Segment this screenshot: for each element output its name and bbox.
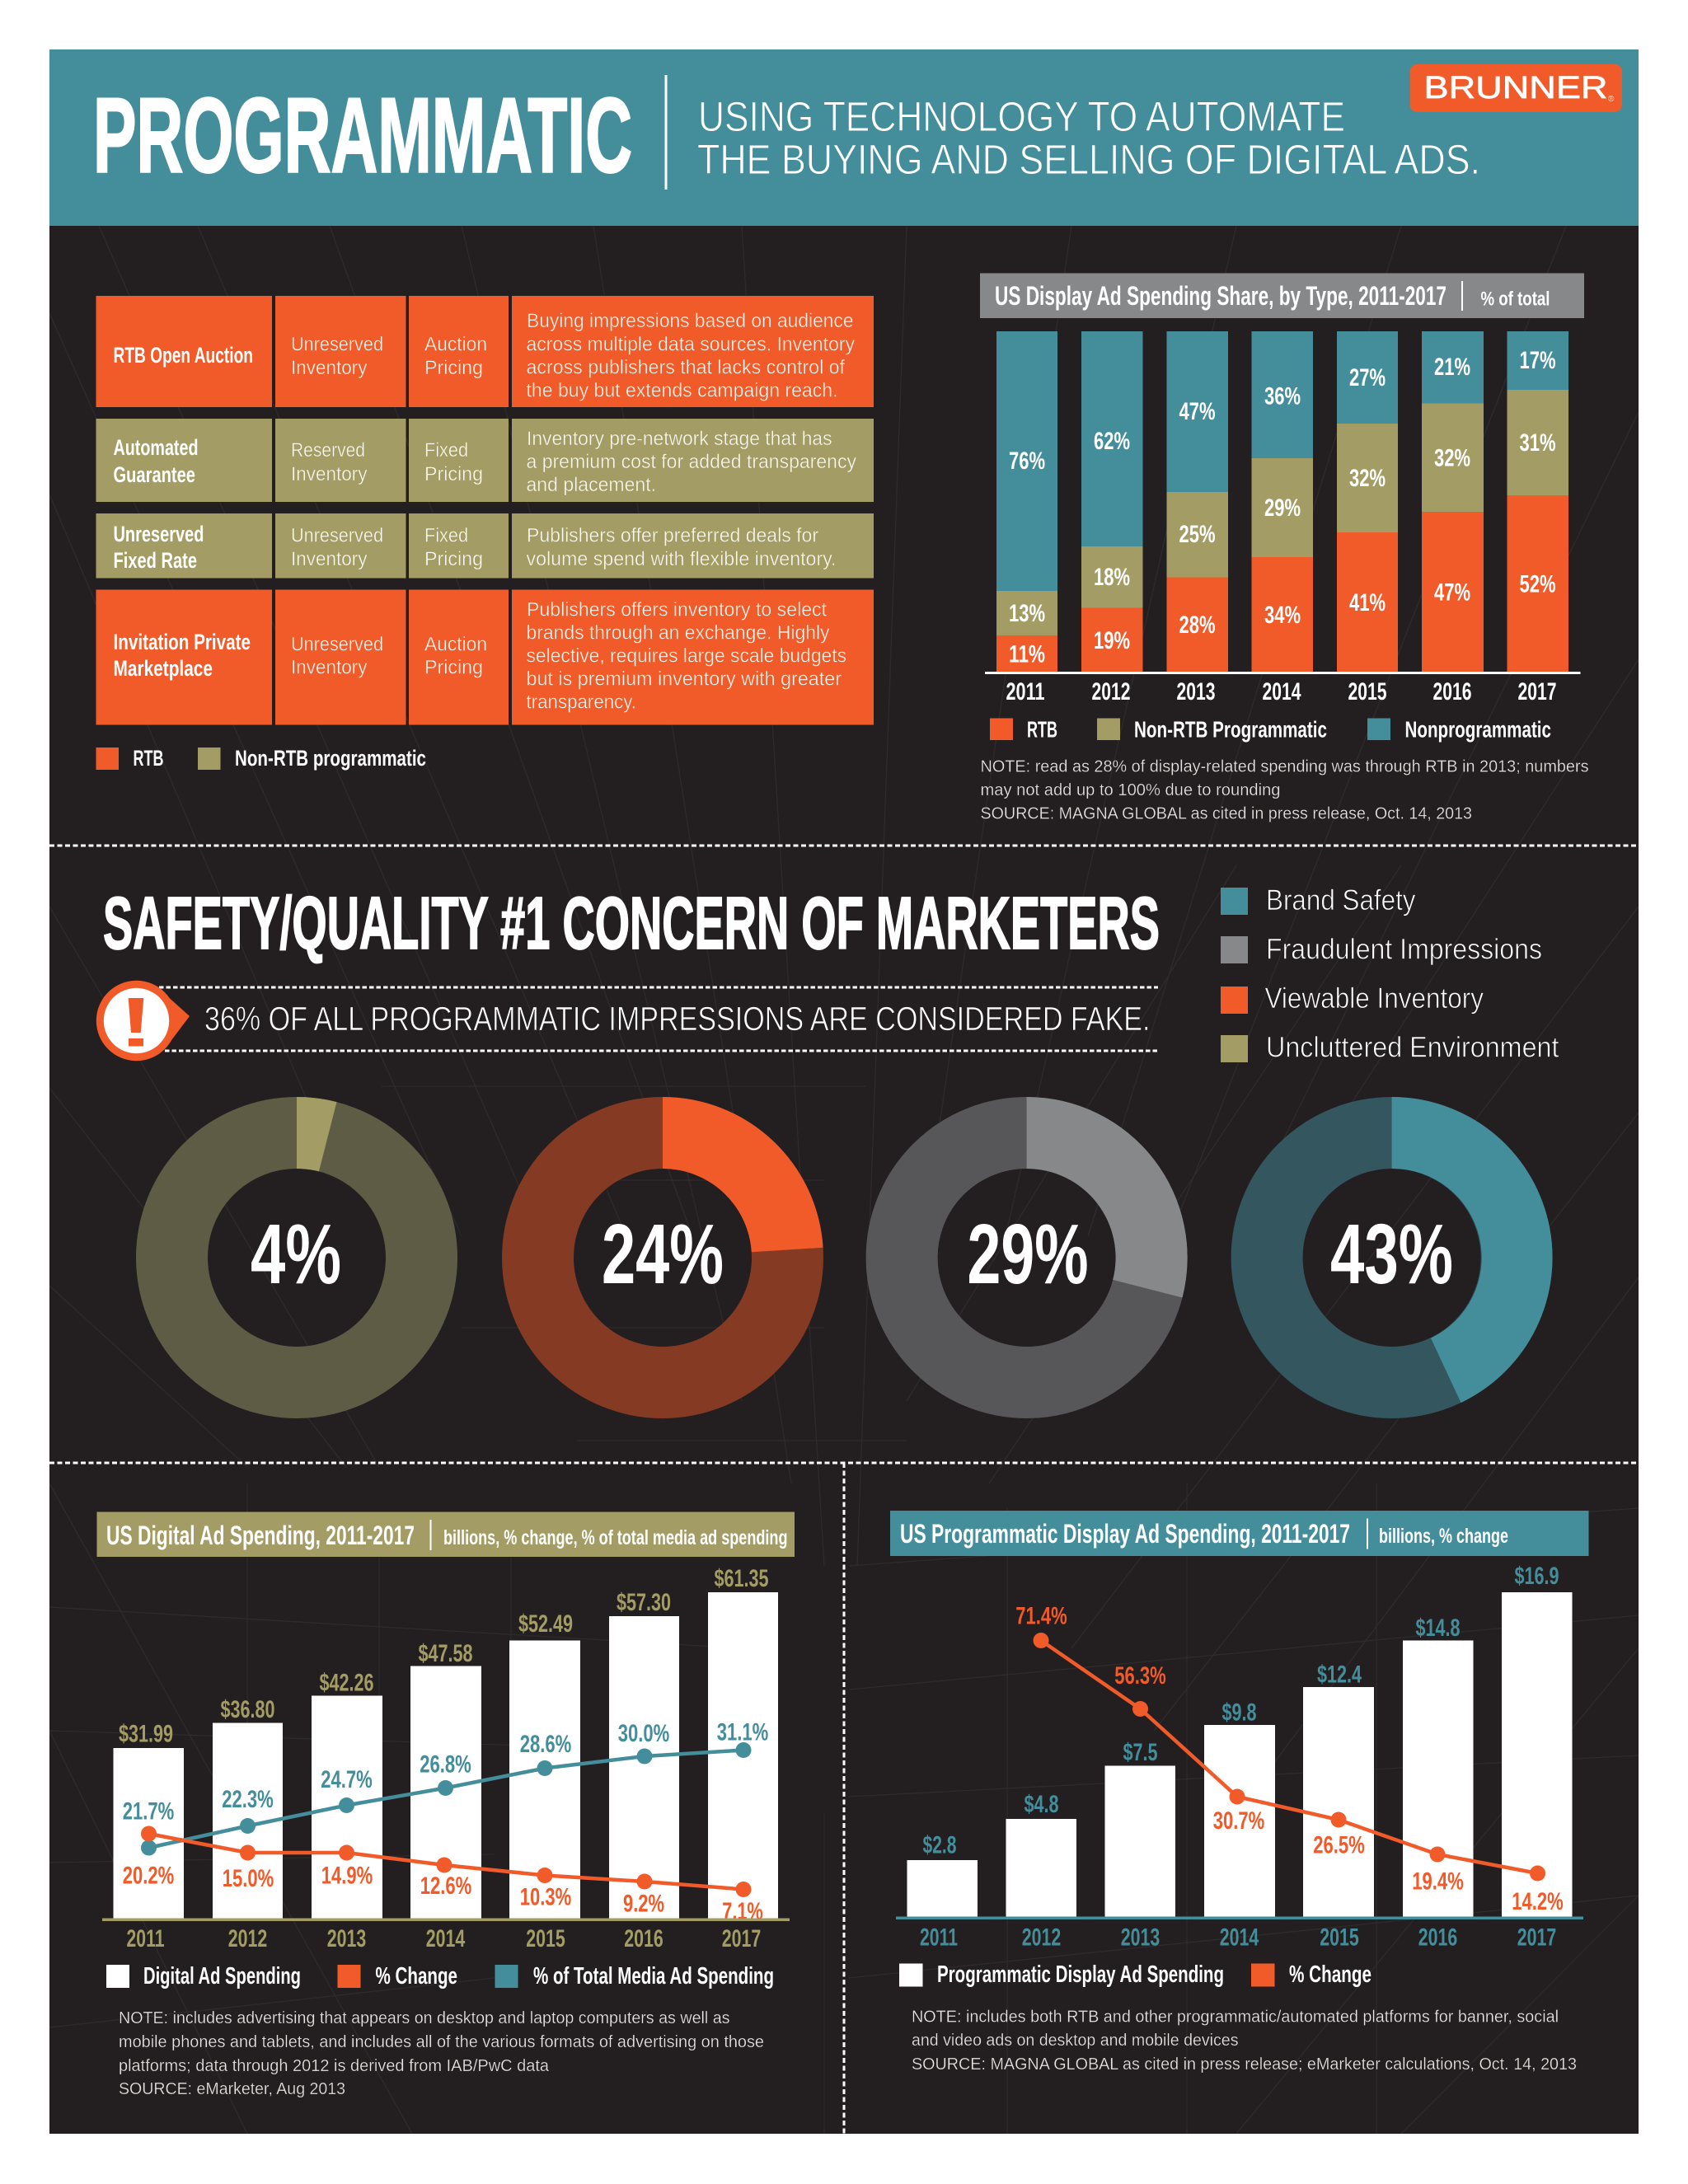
panel: programmatic types table: [96, 296, 874, 771]
x axis with years: 2013: [327, 1925, 366, 1952]
white bars: [907, 1592, 1573, 1917]
line: percent change: 12.6%: [420, 1872, 471, 1900]
bar value labels: 28%: [1179, 612, 1215, 639]
legend: marketer concerns: Viewable Inventory: [1264, 982, 1484, 1015]
line: percent of total media ad spending: 30.0%: [618, 1720, 669, 1747]
bar dollar values: $36.80: [221, 1696, 275, 1723]
table row: Invitation Private Marketplace: Pricing: [424, 656, 483, 679]
table row: RTB Open Auction: across publishers that lacks control of: [526, 356, 845, 379]
table row: RTB Open Auction: the buy but extends campaign reach.: [526, 379, 837, 402]
bar value labels: 34%: [1264, 602, 1301, 629]
table row: Automated Guarantee: Fixed: [424, 439, 468, 462]
donut chart: Fraudulent Impressions 29%: [902, 1097, 1188, 1383]
chart heading: [97, 1511, 795, 1557]
line: percent change: 30.7%: [1213, 1807, 1264, 1835]
table row: RTB Open Auction: [96, 296, 874, 407]
table row: Automated Guarantee: Inventory pre-network stage that has: [527, 428, 832, 450]
bar dollar values: $16.9: [1515, 1563, 1559, 1590]
table row: Invitation Private Marketplace: [96, 590, 874, 725]
bar value labels: 17%: [1520, 347, 1556, 374]
line: percent change: 26.5%: [1313, 1831, 1365, 1859]
table row: Unreserved Fixed Rate: Fixed: [424, 524, 468, 547]
table row: Invitation Private Marketplace: Auction: [424, 633, 487, 656]
donut chart: Brand Safety 43%: 43%: [1330, 1207, 1453, 1301]
bar value labels: 62%: [1094, 428, 1130, 455]
stacked bars: [996, 331, 1568, 672]
line: percent of total media ad spending: 21.7%: [123, 1798, 174, 1825]
table row: RTB Open Auction: Auction: [424, 333, 487, 356]
callout text: 36% OF ALL PROGRAMMATIC IMPRESSIONS ARE CONSIDERED FAKE.: [204, 1000, 1151, 1038]
chart note: [981, 758, 1589, 823]
bar value labels: 47%: [1179, 398, 1215, 425]
table row: Automated Guarantee: Inventory: [291, 463, 368, 485]
chart note: and video ads on desktop and mobile devices: [912, 2032, 1238, 2050]
donut chart: Viewable Inventory 24%: 24%: [602, 1207, 724, 1301]
line: percent change: 14.9%: [321, 1863, 373, 1889]
chart legend: Nonprogrammatic: [1404, 717, 1551, 742]
table row: Unreserved Fixed Rate: Fixed Rate: [114, 548, 197, 573]
chart heading: [890, 1511, 1589, 1556]
table row: RTB Open Auction: across multiple data sources. Inventory: [526, 333, 855, 356]
subtitle: USING TECHNOLOGY TO AUTOMATE: [698, 93, 1345, 140]
table row: Invitation Private Marketplace: but is premium inventory with greater: [526, 668, 842, 691]
bar dollar values: [119, 1565, 768, 1747]
table row: Automated Guarantee: a premium cost for added transparency: [526, 451, 856, 473]
chart note: platforms; data through 2012 is derived from IAB/PwC data: [119, 2057, 550, 2075]
icon: exclamation marker: [96, 981, 190, 1061]
bar value labels: 19%: [1094, 627, 1130, 654]
line: percent change: 20.2%: [123, 1863, 174, 1889]
line: percent of total media ad spending: 24.7%: [321, 1766, 373, 1793]
bar value labels: 32%: [1434, 445, 1470, 471]
callout: [96, 981, 1158, 1061]
bar dollar values: [923, 1563, 1559, 1859]
bar dollar values: $57.30: [617, 1589, 671, 1616]
table row: Invitation Private Marketplace: Unreserved: [291, 633, 383, 656]
bar value labels: 21%: [1434, 354, 1470, 381]
chart note: SOURCE: MAGNA GLOBAL as cited in press release; eMarketer calculations, Oct. 14, 2013: [912, 2055, 1577, 2074]
table row: Automated Guarantee: and placement.: [526, 474, 656, 496]
table row: Automated Guarantee: Automated: [114, 435, 198, 460]
header divider: [664, 75, 668, 190]
header band: [49, 49, 1639, 226]
table row: Unreserved Fixed Rate: Inventory: [291, 548, 368, 570]
line: percent of total media ad spending: 26.8%: [420, 1750, 471, 1779]
line: percent change: 10.3%: [520, 1884, 571, 1910]
table row: Unreserved Fixed Rate: Publishers offer preferred deals for: [527, 524, 818, 547]
x axis with years: 2015: [1320, 1924, 1359, 1952]
chart heading: % of total: [1480, 288, 1550, 310]
panel: US programmatic display ad spending chart: [890, 1511, 1589, 2074]
logo: Brunner: [1409, 64, 1622, 112]
panel: safety and quality concerns: [96, 883, 1559, 1403]
logo: Brunner: BRUNNER: [1424, 71, 1607, 105]
x axis with years: 2016: [1432, 678, 1472, 705]
chart heading: [980, 274, 1584, 318]
line: percent change: [1015, 1602, 1564, 1915]
chart legend: Programmatic Display Ad Spending: [937, 1961, 1224, 1988]
table row: Invitation Private Marketplace: Invitation Private: [114, 630, 251, 654]
title: PROGRAMMATIC: [93, 76, 632, 194]
chart legend: % Change: [376, 1963, 457, 1990]
table row: Invitation Private Marketplace: selective, requires large scale budgets: [526, 644, 846, 668]
table row: RTB Open Auction: RTB Open Auction: [114, 343, 253, 368]
donut chart: Brand Safety 43%: [1267, 1097, 1553, 1403]
x axis with years: 2017: [1518, 678, 1556, 705]
table legend: Non-RTB programmatic: [235, 746, 426, 771]
line: percent of total media ad spending: 28.6%: [520, 1731, 571, 1758]
table row: Automated Guarantee: Reserved: [291, 439, 365, 462]
chart heading: billions, % change, % of total media ad spending: [443, 1526, 788, 1549]
line: percent change: 9.2%: [623, 1891, 664, 1917]
logo: Brunner: ®: [1608, 95, 1615, 104]
chart note: [119, 2009, 764, 2098]
x axis with years: 2016: [624, 1925, 663, 1952]
chart note: SOURCE: MAGNA GLOBAL as cited in press release, Oct. 14, 2013: [981, 804, 1472, 823]
bar dollar values: $2.8: [923, 1831, 956, 1859]
chart heading: US Digital Ad Spending, 2011-2017: [106, 1521, 415, 1550]
bar value labels: 52%: [1520, 570, 1556, 598]
x axis with years: 2011: [920, 1924, 958, 1952]
x axis with years: 2014: [426, 1925, 465, 1952]
line: percent of total media ad spending: [123, 1719, 768, 1856]
x axis with years: 2014: [1220, 1924, 1259, 1952]
line: percent of total media ad spending: 31.1%: [717, 1719, 768, 1746]
bar value labels: 31%: [1520, 429, 1556, 457]
donut chart: Uncluttered Environment 4%: 4%: [251, 1207, 341, 1301]
chart heading: US Display Ad Spending Share, by Type, 2011-2017: [995, 281, 1447, 311]
x axis with years: 2013: [1177, 678, 1215, 705]
table row: Unreserved Fixed Rate: Unreserved: [114, 522, 204, 546]
bar value labels: 32%: [1349, 465, 1386, 492]
line: percent change: 14.2%: [1512, 1888, 1564, 1915]
chart legend: RTB: [1027, 717, 1057, 742]
bar value labels: 29%: [1264, 494, 1301, 522]
table row: Automated Guarantee: [96, 419, 874, 502]
line: percent change: 56.3%: [1114, 1662, 1166, 1690]
x axis with years: 2014: [1263, 678, 1301, 705]
table row: RTB Open Auction: Pricing: [424, 357, 483, 379]
bar dollar values: $12.4: [1317, 1661, 1362, 1688]
chart legend: Non-RTB Programmatic: [1134, 717, 1327, 742]
x axis with years: 2017: [722, 1925, 761, 1952]
x axis with years: 2012: [1091, 678, 1131, 705]
bar value labels: 76%: [1009, 448, 1045, 475]
white bars: [114, 1592, 778, 1919]
bar value labels: 47%: [1434, 579, 1470, 607]
line: percent of total media ad spending: 22.3%: [222, 1786, 274, 1813]
chart heading: billions, % change: [1379, 1525, 1508, 1548]
table row: Unreserved Fixed Rate: Unreserved: [291, 524, 383, 547]
subtitle: [697, 93, 1480, 183]
x axis with years: [102, 1919, 790, 1952]
chart legend: [106, 1963, 774, 1990]
panel: US digital ad spending chart: [97, 1511, 795, 2098]
bar dollar values: $7.5: [1123, 1739, 1157, 1766]
donut chart: Fraudulent Impressions 29%: 29%: [968, 1207, 1088, 1301]
table legend: [96, 746, 426, 771]
table row: Invitation Private Marketplace: Inventory: [291, 656, 368, 679]
legend: marketer concerns: Brand Safety: [1266, 884, 1416, 916]
chart note: NOTE: includes both RTB and other programmatic/automated platforms for banner, social: [912, 2008, 1559, 2026]
table row: Unreserved Fixed Rate: [96, 513, 874, 579]
chart note: mobile phones and tablets, and includes all of the various formats of advertising on those: [119, 2033, 764, 2051]
bar dollar values: $52.49: [518, 1610, 573, 1638]
bar dollar values: $47.58: [419, 1640, 473, 1667]
bar value labels: 27%: [1349, 364, 1386, 391]
table row: RTB Open Auction: Buying impressions based on audience: [527, 310, 854, 332]
bar value labels: 25%: [1179, 521, 1215, 548]
table row: Unreserved Fixed Rate: volume spend with flexible inventory.: [526, 548, 836, 570]
x axis with years: 2012: [228, 1925, 267, 1952]
legend: marketer concerns: [1221, 884, 1559, 1063]
line: percent change: [123, 1826, 763, 1925]
table row: Invitation Private Marketplace: Publishers offers inventory to select: [527, 598, 827, 621]
x axis with years: 2012: [1022, 1924, 1061, 1952]
bar value labels: 18%: [1094, 564, 1130, 591]
bar dollar values: $4.8: [1024, 1791, 1058, 1818]
bar dollar values: $61.35: [714, 1565, 768, 1592]
table row: Automated Guarantee: Pricing: [424, 463, 483, 485]
donut chart: Viewable Inventory 24%: [537, 1097, 823, 1383]
chart legend: [990, 717, 1551, 742]
line: percent change: 19.4%: [1412, 1868, 1464, 1896]
chart legend: % of Total Media Ad Spending: [533, 1963, 774, 1990]
x axis with years: [896, 1917, 1583, 1952]
table row: Invitation Private Marketplace: Marketplace: [114, 656, 213, 681]
table row: RTB Open Auction: Inventory: [291, 357, 368, 379]
line: percent change: 15.0%: [223, 1865, 274, 1892]
chart note: SOURCE: eMarketer, Aug 2013: [119, 2080, 345, 2098]
chart note: [912, 2008, 1577, 2074]
donut chart: Uncluttered Environment 4%: [171, 1097, 422, 1383]
x axis with years: 2015: [526, 1925, 565, 1952]
bar dollar values: $42.26: [320, 1670, 374, 1696]
bar value labels: 41%: [1349, 589, 1386, 616]
x axis with years: 2011: [1006, 678, 1045, 705]
table row: Unreserved Fixed Rate: Pricing: [424, 548, 483, 570]
table row: Invitation Private Marketplace: brands through an exchange. Highly: [526, 621, 829, 644]
bar value labels: 11%: [1009, 641, 1045, 668]
x axis with years: 2013: [1121, 1924, 1160, 1952]
line: percent change: 7.1%: [722, 1898, 763, 1925]
x axis with years: 2011: [127, 1925, 165, 1952]
chart heading: US Programmatic Display Ad Spending, 2011-2017: [900, 1519, 1350, 1549]
chart legend: % Change: [1289, 1961, 1372, 1988]
bar dollar values: $14.8: [1416, 1615, 1461, 1642]
x axis with years: [985, 672, 1581, 705]
x axis with years: 2016: [1418, 1924, 1457, 1952]
table legend: RTB: [134, 746, 163, 771]
x axis with years: 2017: [1517, 1924, 1556, 1952]
bar value labels: 36%: [1264, 382, 1301, 410]
chart note: may not add up to 100% due to rounding: [981, 781, 1281, 799]
legend: marketer concerns: Fraudulent Impressions: [1266, 933, 1542, 966]
chart note: NOTE: includes advertising that appears on desktop and laptop computers as well as: [119, 2009, 730, 2027]
x axis with years: 2015: [1348, 678, 1386, 705]
panel: US display ad spending share stacked bar chart: [980, 274, 1589, 823]
bar value labels: 13%: [1009, 600, 1045, 627]
table row: Invitation Private Marketplace: transparency.: [526, 691, 636, 714]
line: percent change: 71.4%: [1015, 1602, 1067, 1630]
chart note: NOTE: read as 28% of display-related spending was through RTB in 2013; numbers: [981, 758, 1589, 776]
table row: RTB Open Auction: Unreserved: [291, 333, 383, 356]
bar value labels: [1009, 347, 1556, 668]
chart legend: Digital Ad Spending: [143, 1963, 301, 1990]
bar dollar values: $9.8: [1221, 1699, 1256, 1726]
table row: Automated Guarantee: Guarantee: [114, 462, 195, 487]
subtitle: THE BUYING AND SELLING OF DIGITAL ADS.: [697, 136, 1480, 183]
legend: marketer concerns: Uncluttered Environment: [1266, 1032, 1559, 1063]
bar dollar values: $31.99: [119, 1721, 173, 1747]
